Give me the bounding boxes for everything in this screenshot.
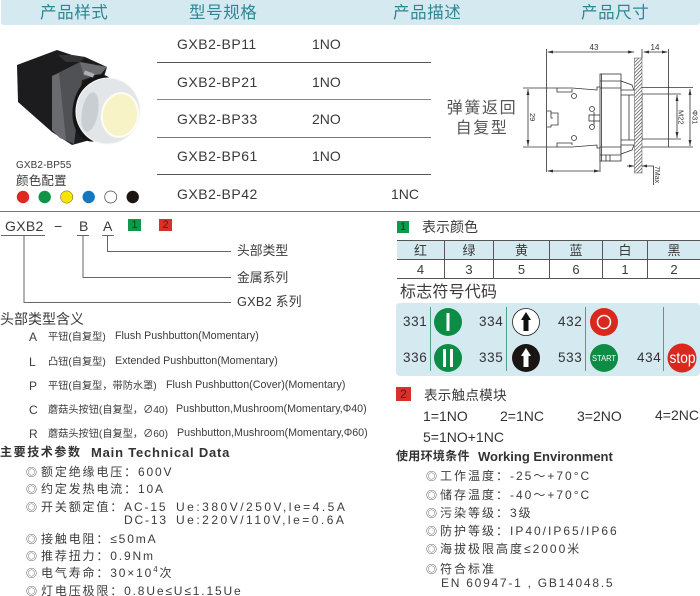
icon: black arrow up: [512, 344, 540, 372]
product photo: push button: [17, 50, 140, 145]
colour code table: 蓝: [569, 243, 582, 258]
heading: product style: 产品样式: [40, 4, 108, 22]
model row 5: GXB2-BP42: [177, 186, 258, 202]
badge 2: 2: [400, 387, 407, 401]
head type A: A: [29, 330, 37, 344]
label: metal series: 金属系列: [237, 270, 288, 284]
code 533: 533: [558, 350, 582, 365]
code badge 2: 2: [162, 219, 169, 231]
header band: [1, 0, 700, 25]
colour code table: 3: [465, 262, 473, 277]
icon: green I: [434, 308, 462, 336]
head type C text: 蘑菇头按钮(自复型，∅40): [48, 405, 168, 416]
icon: red O: [590, 308, 618, 336]
contact row 2: 1NO: [312, 74, 341, 90]
contact code 2: 2=1NC: [500, 408, 544, 424]
badge 2: [396, 387, 411, 401]
heading: working environment english: Working Environment: [478, 449, 613, 464]
env: standards: 符合标准: [440, 562, 496, 576]
env: storage temperature: ◎: [426, 490, 437, 502]
model row 1: GXB2-BP11: [177, 36, 257, 52]
spec: electrical life: 电气寿命：30×104次: [41, 565, 173, 580]
dimension drawing: 29: [528, 113, 537, 121]
env: pollution: ◎: [426, 508, 437, 520]
colour code table: [397, 240, 700, 279]
dimension drawing: 7Max: [653, 166, 660, 184]
head type P english: Flush Pushbutton(Cover)(Momentary): [166, 379, 345, 391]
heading: main technical data english: Main Technical Data: [91, 445, 230, 460]
spec: contact resistance: 接触电阻：≤50mA: [41, 532, 157, 546]
colour code table: 1: [621, 262, 629, 277]
icon: start: START: [592, 354, 616, 363]
heading: head type meaning: 头部类型含义: [0, 311, 84, 327]
dimension drawing: [523, 43, 700, 185]
dimension drawing: 14: [651, 43, 660, 52]
contact code 3: 3=2NO: [577, 408, 622, 424]
icon: stop: [668, 344, 696, 372]
code leader lines: [1, 235, 231, 303]
description text: [447, 99, 517, 137]
env: protection: ◎: [426, 526, 437, 538]
code B: B: [79, 218, 88, 234]
icon: start: [590, 344, 618, 372]
env: protection: 防护等级：IP40/IP65/IP66: [440, 524, 619, 538]
contact row 5: 1NC: [391, 186, 419, 202]
heading: main technical data: 主要技术参数: [0, 445, 82, 459]
contact row 1: 1NO: [312, 36, 341, 52]
spec: switch rating: 开关额定值：AC-15: [41, 500, 167, 514]
env: operating temperature: ◎: [426, 471, 437, 483]
env: storage temperature: 储存温度：-40～+70°C: [440, 488, 591, 502]
head type C english: Pushbutton,Mushroom(Momentary,Φ40): [176, 403, 367, 415]
heading: dimensions: 产品尺寸: [581, 4, 649, 22]
head type L text: 凸钮(自复型): [48, 357, 106, 368]
code 336: 336: [403, 350, 427, 365]
model row 4: GXB2-BP61: [177, 148, 258, 164]
heading: model: 型号规格: [189, 4, 257, 22]
head type L: L: [29, 355, 36, 369]
spec: switch rating DC values: Ue:220V/110V,le=0.6A: [176, 513, 346, 527]
model row 3: GXB2-BP33: [177, 111, 258, 127]
icon: white arrow up: [512, 308, 540, 336]
contact code 5: 5=1NO+1NC: [423, 429, 504, 445]
head type R english: Pushbutton,Mushroom(Momentary,Φ60): [177, 427, 368, 439]
code 432: 432: [558, 314, 582, 329]
icon: green II: [434, 344, 462, 372]
spec: contact resistance: ◎: [26, 534, 37, 546]
colour code table: 红: [414, 243, 427, 258]
spec: switch rating DC: DC-13: [124, 513, 168, 527]
env: operating temperature: 工作温度：-25～+70°C: [440, 469, 591, 483]
head type P: P: [29, 379, 37, 393]
code badge 1: [128, 219, 141, 231]
code 334: 334: [479, 314, 503, 329]
heading: contact module: 表示触点模块: [424, 388, 507, 402]
colour code table: 黑: [667, 243, 680, 258]
contact row 3: 2NO: [312, 111, 341, 127]
spec: torque: 推荐扭力：0.9Nm: [41, 549, 155, 563]
code badge 2: [159, 219, 172, 231]
dimension drawing: 43: [590, 43, 599, 52]
env: pollution: 污染等级：3级: [440, 506, 533, 520]
contact code 1: 1=1NO: [423, 408, 468, 424]
label: head type: 头部类型: [237, 242, 288, 258]
head type R: R: [29, 427, 38, 441]
description text: 弹簧返回: [447, 100, 517, 117]
head type P text: 平钮(自复型，带防水罩): [48, 381, 157, 392]
colour code table: 6: [572, 262, 580, 277]
contact code 4: 4=2NC: [655, 407, 699, 423]
panel: symbol codes: [396, 303, 700, 376]
dimension drawing: M22: [676, 110, 686, 125]
spec: electrical life: ◎: [26, 568, 37, 580]
head type R text: 蘑菇头按钮(自复型，∅60): [48, 429, 168, 440]
colour code table: 绿: [462, 243, 476, 258]
code A: A: [103, 218, 112, 234]
env: standards: ◎: [426, 564, 437, 576]
spec: switch rating: ◎: [26, 502, 37, 514]
spec: torque: ◎: [26, 551, 37, 563]
spec: thermal current: ◎: [26, 484, 37, 496]
head type C: C: [29, 403, 38, 417]
badge 1: 1: [400, 221, 406, 233]
head type L english: Extended Pushbutton(Momentary): [115, 355, 278, 367]
label: GXB2 series: GXB2 系列: [237, 294, 302, 308]
spec: insulation voltage: ◎: [26, 467, 37, 479]
heading: description: 产品描述: [393, 4, 461, 22]
heading: working environment: 使用环境条件: [396, 449, 470, 463]
colour code table: 白: [618, 243, 632, 258]
env: standards list: EN 60947-1 , GB14048.5: [441, 576, 614, 590]
product code: GXB2-BP55: [16, 160, 71, 170]
code dash: −: [54, 218, 62, 234]
contact row 4: 1NO: [312, 148, 341, 164]
code GXB2: GXB2: [5, 218, 44, 234]
icon: stop: stop: [670, 350, 696, 367]
env: altitude: ◎: [426, 544, 437, 556]
code 434: 434: [637, 350, 661, 365]
colour swatches: [16, 190, 139, 204]
head type A text: 平钮(自复型): [48, 332, 106, 343]
spec: thermal current: 约定发热电流：10A: [41, 482, 165, 496]
heading: colour code: 表示颜色: [422, 219, 478, 235]
env: altitude: 海拔极限高度≤2000米: [440, 542, 581, 556]
colour code table: 5: [518, 262, 525, 277]
model row 2: GXB2-BP21: [177, 74, 258, 90]
spec: insulation voltage: 额定绝缘电压：600V: [41, 465, 173, 479]
colour config label: 颜色配置: [16, 174, 67, 188]
code badge 1: 1: [131, 219, 138, 231]
colour code table: 4: [417, 262, 424, 277]
code 335: 335: [479, 350, 503, 365]
dimension drawing: Φ31: [690, 110, 700, 124]
colour code table: 黄: [515, 243, 528, 258]
badge 1: [397, 221, 409, 233]
colour code table: 2: [670, 262, 678, 277]
heading: symbol codes: 标志符号代码: [400, 284, 497, 301]
spec: switch rating AC values: Ue:380V/250V,le=4.5A: [176, 500, 347, 514]
code 331: 331: [403, 314, 427, 329]
head type A english: Flush Pushbutton(Momentary): [115, 330, 259, 342]
description text: 自复型: [456, 120, 508, 137]
